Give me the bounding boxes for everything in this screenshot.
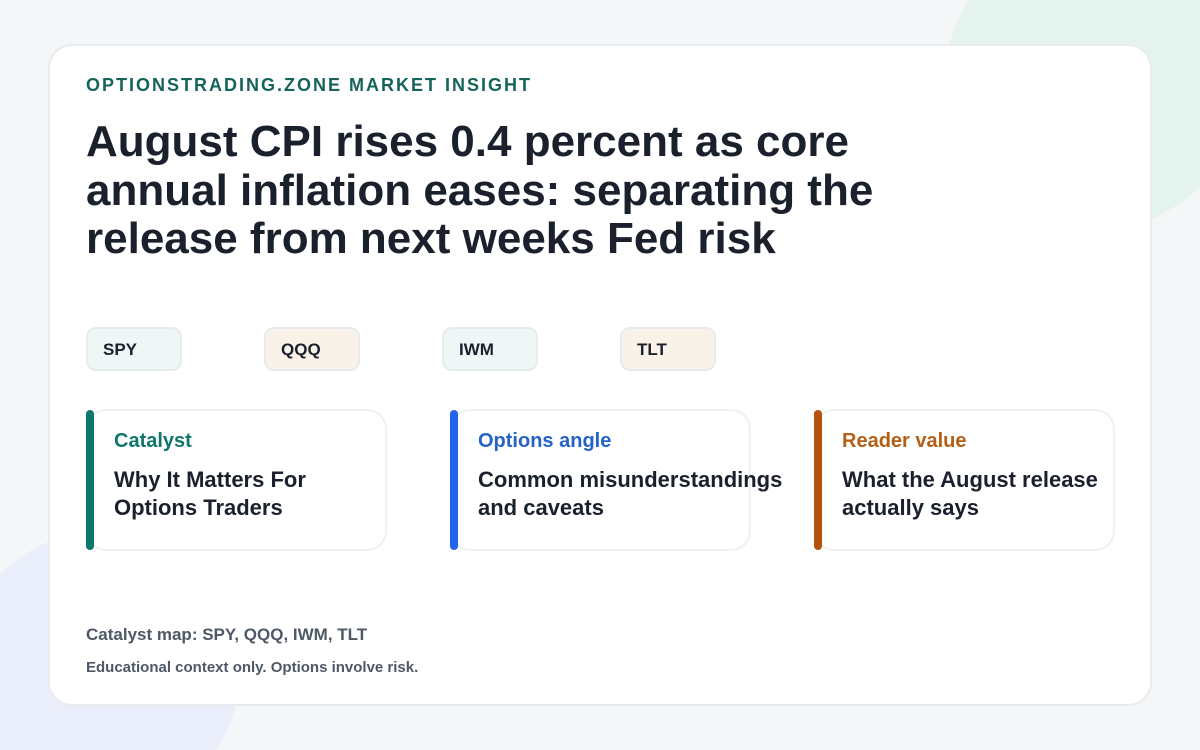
- title: [86, 117, 873, 263]
- card text: reader value: actually says: [842, 495, 979, 520]
- disclaimer: Educational context only. Options involve risk.: [86, 659, 418, 676]
- card label: catalyst: Catalyst: [114, 430, 192, 452]
- title: release from next weeks Fed risk: [86, 214, 776, 263]
- card: reader value: [814, 409, 1115, 551]
- card text: options angle: Common misunderstandings: [478, 467, 782, 492]
- ticker chip: IWM: IWM: [459, 340, 494, 359]
- card: options angle: [450, 409, 782, 551]
- title: August CPI rises 0.4 percent as core: [86, 117, 849, 166]
- card: catalyst: [86, 409, 387, 551]
- background circle: blue: [0, 532, 240, 750]
- card text: reader value: [842, 467, 1098, 520]
- eyebrow heading: OPTIONSTRADING.ZONE MARKET INSIGHT: [86, 75, 532, 95]
- card text: catalyst: [114, 467, 306, 520]
- background circle: green: [945, 0, 1200, 230]
- ticker chip: SPY: SPY: [103, 340, 137, 359]
- ticker chip: SPY: [86, 327, 182, 371]
- card text: catalyst: Options Traders: [114, 495, 283, 520]
- card text: catalyst: Why It Matters For: [114, 467, 306, 492]
- title: annual inflation eases: separating the: [86, 166, 873, 214]
- catalyst map line: Catalyst map: SPY, QQQ, IWM, TLT: [86, 625, 367, 644]
- card label: reader value: Reader value: [842, 430, 967, 452]
- ticker chip: QQQ: [264, 327, 360, 371]
- ticker chip: IWM: [442, 327, 538, 371]
- card text: options angle: [478, 467, 782, 520]
- ticker chip: TLT: [620, 327, 716, 371]
- ticker chip: TLT: TLT: [637, 340, 667, 359]
- ticker chip: QQQ: QQQ: [281, 340, 321, 359]
- card text: reader value: What the August release: [842, 467, 1098, 492]
- card text: options angle: and caveats: [478, 495, 604, 520]
- card label: options angle: Options angle: [478, 430, 611, 452]
